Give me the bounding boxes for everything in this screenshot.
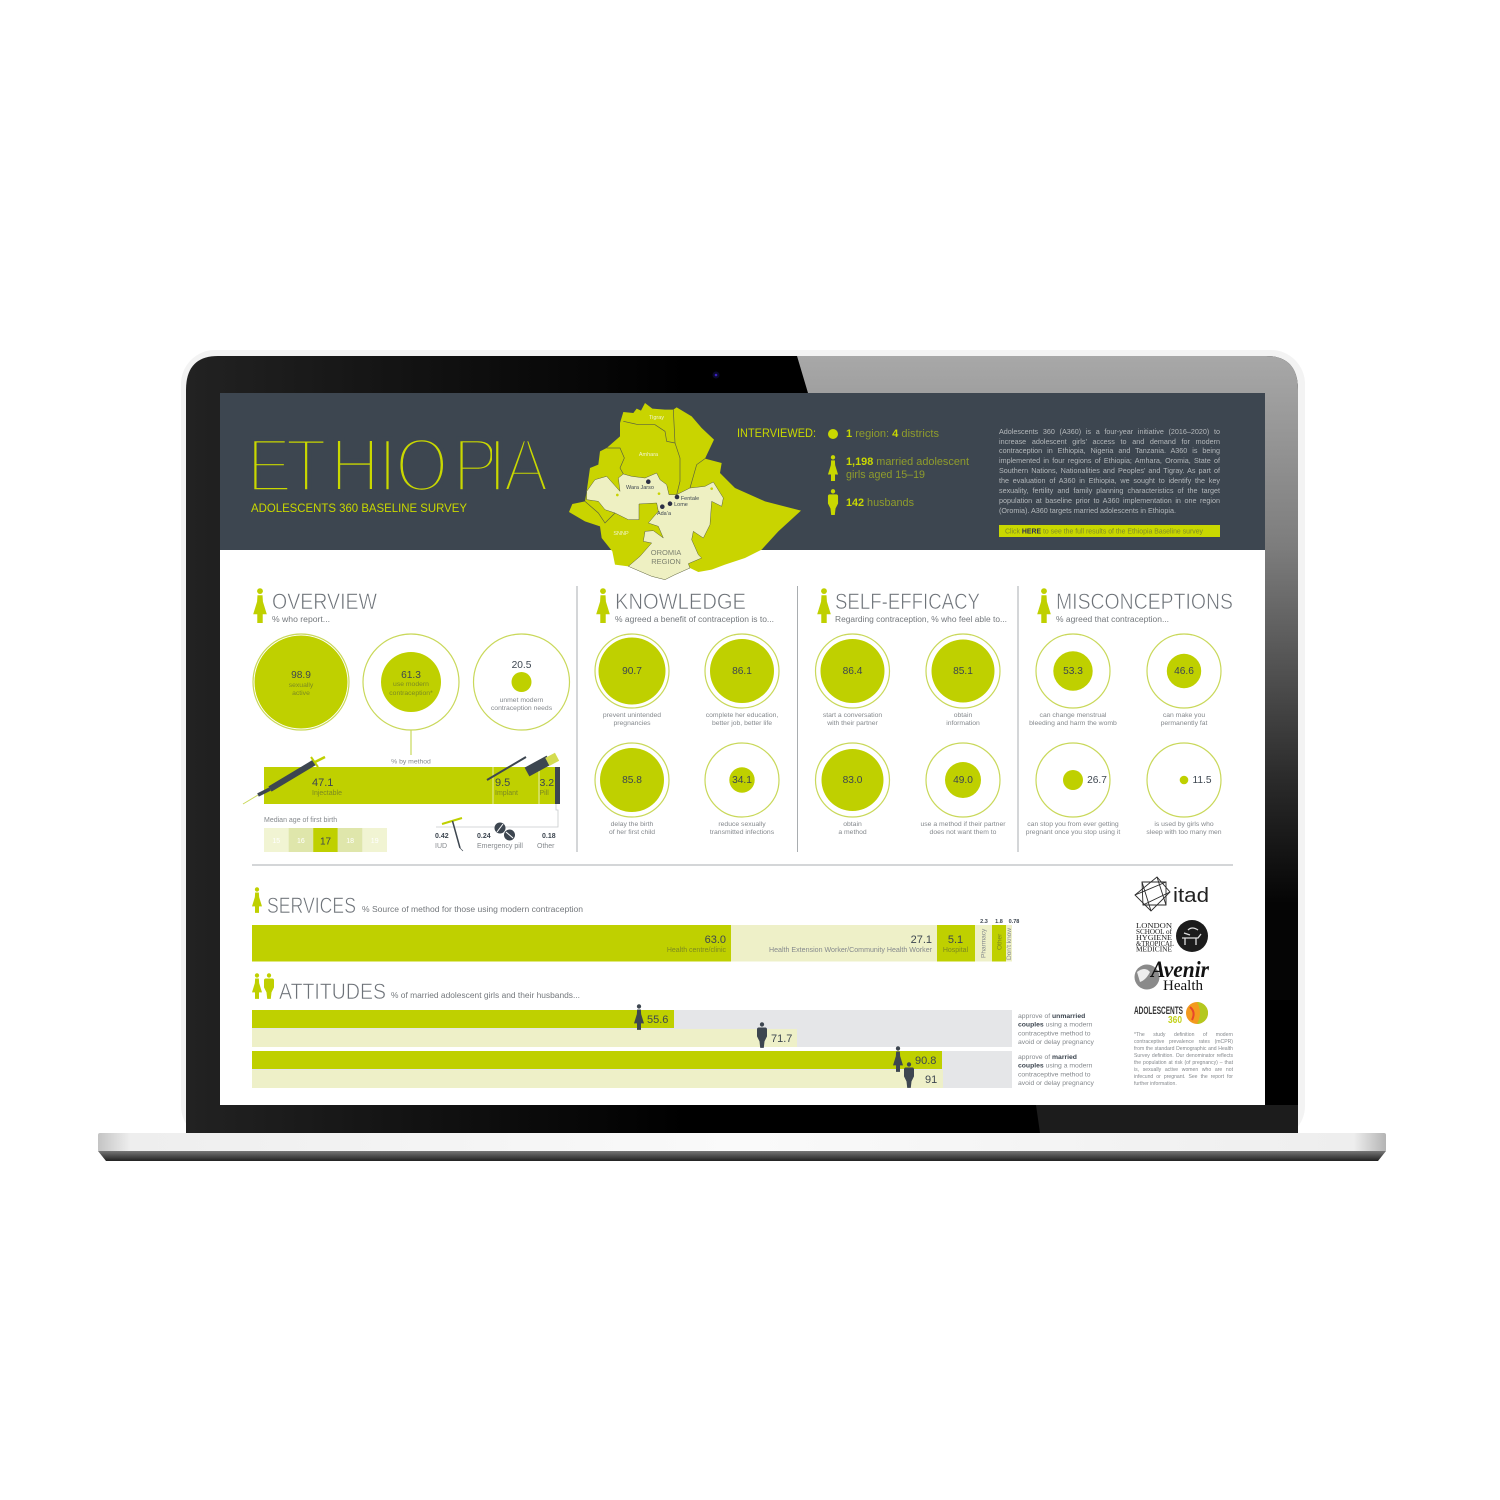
- method bar chart: Injectable: [312, 790, 342, 797]
- services stacked bar: Don't know: [1006, 928, 1013, 960]
- icon: syringe: [243, 757, 325, 804]
- map labels: Tigray: [649, 415, 664, 421]
- stat: too many men: sleep with too many men: [1146, 829, 1222, 836]
- minor method labels: [435, 833, 556, 850]
- subheading: % of married adolescent girls and their husbands...: [391, 991, 580, 1000]
- icon: pill pack: [527, 753, 559, 772]
- text: unmarried couples: approve of unmarried: [1018, 1013, 1085, 1020]
- footnote: the population at risk (of pregnancy) – that: [1134, 1060, 1233, 1066]
- median age scale: 16: [297, 838, 305, 845]
- icons: woman and man: [252, 973, 274, 999]
- services stacked bar: [252, 919, 1019, 962]
- panel: overview: [243, 588, 570, 852]
- interviewed stat: girls: girls aged 15–19: [846, 469, 925, 481]
- minor method labels: 0.42: [435, 833, 449, 840]
- heading: self-efficacy: SELF-EFFICACY: [835, 589, 980, 614]
- stat: reduce STIs: [705, 743, 779, 836]
- method bar chart: 47.1: [312, 777, 333, 789]
- bars: unmarried couples: 55.6: [647, 1014, 668, 1026]
- median age scale: 15: [272, 838, 280, 845]
- stat: use a method: 49.0: [953, 775, 973, 786]
- map labels: Ada’a: [657, 511, 672, 517]
- stat: sexually active: active: [292, 690, 310, 697]
- stat: menstrual bleeding: [1029, 634, 1117, 727]
- panel: attitudes: [252, 973, 1095, 1088]
- panel: knowledge: [595, 588, 779, 836]
- heading: overview: OVERVIEW: [272, 589, 378, 614]
- logo: LSHTM: HYGIENE: [1136, 933, 1173, 942]
- footnote: [1134, 1032, 1233, 1090]
- stat: permanently fat: [1147, 634, 1221, 727]
- panel: self-efficacy: [816, 588, 1007, 836]
- stat: use modern contraception: 61.3: [401, 670, 421, 681]
- text: married couples: using a modern: [1046, 1063, 1092, 1070]
- interviewed stat: husbands: 142 husbands: [846, 497, 914, 509]
- map labels: SNNP: [613, 531, 629, 537]
- subheading: % agreed that contraception...: [1056, 615, 1169, 624]
- icon: woman: [1037, 588, 1051, 623]
- stat: stop pregnancy: pregnant once you stop using it: [1026, 829, 1120, 836]
- stat: prevent unintended pregnancies: prevent unintended: [603, 712, 661, 719]
- logo: Adolescents 360: 360: [1168, 1015, 1182, 1026]
- services stacked bar: Other: [996, 933, 1004, 950]
- stat: obtain information: 85.1: [953, 666, 973, 677]
- intro text block: the evaluation of A360 in Ethiopia, we sought to identify the key: [999, 476, 1220, 485]
- logo: itad: [1135, 877, 1209, 911]
- intro text block: implemented in four regions of Ethiopia; Amhara, Oromia, State of: [999, 456, 1220, 465]
- stat: delay first birth: 85.8: [622, 775, 642, 786]
- icon: IUD: [442, 818, 463, 851]
- stat: start a conversation: [816, 634, 890, 727]
- text: married couples: avoid or delay pregnancy: [1018, 1080, 1095, 1087]
- map labels: Lome: [674, 502, 688, 508]
- intro text block: Adolescents 360 (A360) is a four-year initiative (2016–2020) to: [999, 427, 1220, 436]
- median age scale: 17: [320, 836, 331, 848]
- laptop frame: [98, 350, 1386, 1161]
- method bar chart: 9.5: [495, 777, 510, 789]
- stat: use modern contraception: [363, 634, 459, 730]
- stat: obtain information: [926, 634, 1000, 727]
- median age label: Median age of first birth: [264, 817, 337, 824]
- stat: complete education: complete her education,: [706, 712, 778, 719]
- footnote: is, sexually active women who are not: [1134, 1067, 1233, 1073]
- services stacked bar: 1.8: [995, 919, 1003, 925]
- stat: unmet need: [474, 634, 570, 730]
- bars: married couples: 90.8: [915, 1055, 936, 1067]
- stat: too many men: is used by girls who: [1154, 821, 1214, 828]
- stat: sexually active: [253, 634, 349, 730]
- services stacked bar: Health centre/clinic: [667, 947, 726, 954]
- stat: unmet need: 20.5: [512, 660, 532, 671]
- intro text block: Southern Nations, Nationalities and Peoples’ and Tigray. As part of: [999, 466, 1220, 475]
- bars: married couples: [252, 1046, 1012, 1088]
- logo: Adolescents 360: ADOLESCENTS: [1134, 1005, 1183, 1017]
- footnote: *The study definition of modern: [1134, 1032, 1233, 1038]
- stat: menstrual bleeding: 53.3: [1063, 666, 1083, 677]
- minor method labels: Emergency pill: [477, 843, 523, 850]
- stat: menstrual bleeding: bleeding and harm the womb: [1029, 720, 1117, 727]
- stat: prevent unintended pregnancies: pregnancies: [613, 720, 651, 727]
- call to action button: [999, 525, 1220, 537]
- map labels: [613, 415, 699, 566]
- stat: use a method: does not want them to: [930, 829, 997, 836]
- stat: permanently fat: permanently fat: [1161, 720, 1208, 727]
- region borders: [585, 410, 705, 523]
- stat: stop pregnancy: 26.7: [1087, 775, 1107, 786]
- text: married couples: contraceptive method to: [1018, 1071, 1091, 1078]
- header panel: [220, 393, 1265, 550]
- stat: use a method: use a method if their partner: [920, 821, 1006, 828]
- connector line: [436, 804, 558, 827]
- intro text block: sexuality, fertility and family planning characteristics of the target: [999, 486, 1220, 495]
- bars: unmarried couples: [252, 1004, 1012, 1048]
- Oromia region: [587, 473, 723, 580]
- interviewed heading: INTERVIEWED:: [737, 428, 816, 440]
- text: married couples: approve of married: [1018, 1054, 1077, 1061]
- screen: [220, 393, 1265, 1105]
- services stacked bar: 0.78: [1009, 919, 1019, 925]
- stat: permanently fat: can make you: [1163, 712, 1205, 719]
- map of Ethiopia: [569, 403, 801, 580]
- icon: woman: [817, 588, 831, 623]
- median age scale: [264, 828, 387, 852]
- stat: complete education: [705, 634, 779, 727]
- subheading: % Source of method for those using modern contraception: [362, 905, 583, 914]
- stat: obtain a method: a method: [838, 829, 867, 836]
- services stacked bar: Pharmacy: [980, 928, 988, 958]
- stat: too many men: [1146, 743, 1222, 836]
- stat: sexually active: sexually: [289, 682, 314, 689]
- stat: obtain a method: 83.0: [843, 775, 863, 786]
- subheading: Regarding contraception, % who feel able to...: [835, 615, 1007, 624]
- map labels: REGION: [651, 557, 681, 566]
- stat: start a conversation: start a conversation: [823, 712, 882, 719]
- interviewed stat: girls: 1,198 married adolescent: [846, 456, 969, 468]
- stat: obtain a method: [816, 743, 890, 836]
- median age scale: 18: [346, 838, 354, 845]
- footnote: further information.: [1134, 1081, 1177, 1087]
- icon: emergency pills: [494, 822, 515, 840]
- heading: knowledge: KNOWLEDGE: [615, 589, 746, 614]
- logo: Adolescents 360: [1134, 1002, 1208, 1026]
- logo: itad: itad: [1173, 885, 1209, 907]
- panel: services: [252, 887, 1019, 962]
- map labels: Wara Jarso: [626, 485, 654, 491]
- logo: Avenir Health: [1134, 957, 1210, 994]
- logo: LSHTM: &TROPICAL: [1136, 939, 1174, 948]
- stat: unmet need: contraception needs: [491, 705, 553, 712]
- intro text block: contraception in Ethiopia, Nigeria and Tanzania. A360 is being: [999, 446, 1220, 455]
- logo: LSHTM: [1136, 920, 1208, 954]
- subheading: % agreed a benefit of contraception is to...: [615, 615, 774, 624]
- bars: unmarried couples: 71.7: [771, 1033, 792, 1045]
- services stacked bar: 2.3: [980, 919, 988, 925]
- map labels: Fentale: [681, 496, 699, 502]
- icon: woman: [253, 588, 267, 623]
- minor method labels: 0.24: [477, 833, 491, 840]
- stat: use modern contraception: contraception*: [389, 690, 433, 697]
- intro text block: [999, 427, 1220, 519]
- stat: sexually active: 98.9: [291, 670, 311, 681]
- map labels: OROMIA: [651, 548, 681, 557]
- stat: reduce STIs: transmitted infections: [710, 829, 775, 836]
- small pale dots: [616, 487, 713, 496]
- stat: use modern contraception: use modern: [393, 681, 429, 688]
- logo: LSHTM: LONDON: [1136, 921, 1173, 930]
- intro text block: (Oromia). A360 targets married adolescents in Ethiopia.: [999, 506, 1176, 515]
- stat: complete education: 86.1: [732, 666, 752, 677]
- median age scale: 19: [371, 838, 379, 845]
- stat: obtain information: information: [946, 720, 980, 727]
- subheading: % who report...: [272, 615, 330, 624]
- stat: too many men: 11.5: [1192, 775, 1212, 786]
- logo: LSHTM: SCHOOL of: [1136, 927, 1173, 936]
- divider lines: [252, 586, 1233, 865]
- logo: Avenir Health: Avenir: [1149, 957, 1210, 982]
- call to action button: Click HERE to see the full results of the Ethiopia Baseline survey: [1005, 528, 1203, 536]
- method bar chart: [264, 767, 560, 804]
- minor method labels: 0.18: [542, 833, 556, 840]
- heading: misconceptions: MISCONCEPTIONS: [1056, 589, 1233, 614]
- stat: unmet need: unmet modern: [500, 697, 544, 704]
- footnote: from the standard Demographic and Health: [1134, 1046, 1233, 1052]
- heading: attitudes: ATTITUDES: [279, 979, 386, 1004]
- heading: services: SERVICES: [267, 893, 356, 918]
- text: unmarried couples: using a modern: [1046, 1022, 1092, 1029]
- panel: misconceptions: [1026, 588, 1233, 836]
- stat: delay first birth: delay the birth: [611, 821, 654, 828]
- title: ETHIOPIA: [247, 424, 549, 508]
- icon: woman: [596, 588, 610, 623]
- stat: menstrual bleeding: can change menstrual: [1040, 712, 1107, 719]
- text: married couples: couples: [1018, 1063, 1044, 1070]
- icon: woman: [252, 887, 262, 913]
- stat: stop pregnancy: can stop you from ever getting: [1027, 821, 1119, 828]
- interviewed stat: husbands: [828, 489, 914, 515]
- stat: delay first birth: [595, 743, 669, 836]
- stat: use a method: [920, 743, 1006, 836]
- stat: obtain a method: obtain: [843, 821, 862, 828]
- stat: start a conversation: with their partner: [826, 720, 879, 727]
- services stacked bar: Hospital: [943, 947, 969, 954]
- logo: LSHTM: MEDICINE: [1136, 944, 1172, 954]
- services stacked bar: Health Extension Worker/Community Health Worker: [769, 947, 933, 954]
- stat: obtain information: obtain: [954, 712, 972, 719]
- services stacked bar: 63.0: [705, 934, 726, 946]
- stat: delay first birth: of her first child: [609, 829, 655, 836]
- footnote: contraceptive prevalence rates (mCPR): [1134, 1039, 1233, 1045]
- intro text block: increase adolescent girls’ access to and demand for modern: [999, 437, 1220, 446]
- method bar chart: 3.2: [540, 777, 554, 789]
- icon: implant: [487, 757, 526, 780]
- interviewed stat: girls: [828, 455, 969, 481]
- intro text block: population at baseline prior to A360 implementation in one region: [999, 496, 1220, 505]
- stat: prevent unintended pregnancies: [595, 634, 669, 727]
- map town dots: [646, 479, 679, 509]
- minor method labels: IUD: [435, 843, 447, 850]
- interviewed stat: region: 1 region: 4 districts: [846, 428, 939, 440]
- stat: reduce STIs: reduce sexually: [718, 821, 766, 828]
- chart label: % by method: [391, 758, 431, 766]
- services stacked bar: 27.1: [911, 934, 932, 946]
- stat: complete education: better job, better life: [712, 720, 772, 727]
- text: unmarried couples: avoid or delay pregnancy: [1018, 1039, 1095, 1046]
- subtitle: ADOLESCENTS 360 BASELINE SURVEY: [251, 501, 467, 515]
- stat: permanently fat: 46.6: [1174, 666, 1194, 677]
- bars: married couples: 91: [925, 1074, 937, 1086]
- text: unmarried couples: contraceptive method to: [1018, 1030, 1091, 1037]
- map labels: Amhara: [639, 452, 659, 458]
- method bar chart: Implant: [495, 790, 518, 797]
- logo: Avenir Health: Health: [1163, 978, 1203, 994]
- footnote: infecund or pregnant. See the report for: [1134, 1074, 1233, 1080]
- method bar chart: Pill: [540, 790, 549, 797]
- stat: start a conversation: 86.4: [843, 666, 863, 677]
- services stacked bar: 5.1: [948, 934, 963, 946]
- stat: stop pregnancy: [1026, 743, 1120, 836]
- text: unmarried couples: couples: [1018, 1022, 1044, 1029]
- stat: reduce STIs: 34.1: [732, 775, 752, 786]
- footnote: Survey definition. Our denominator reflects: [1134, 1053, 1233, 1059]
- minor method labels: Other: [537, 843, 555, 850]
- stat: prevent unintended pregnancies: 90.7: [622, 666, 642, 677]
